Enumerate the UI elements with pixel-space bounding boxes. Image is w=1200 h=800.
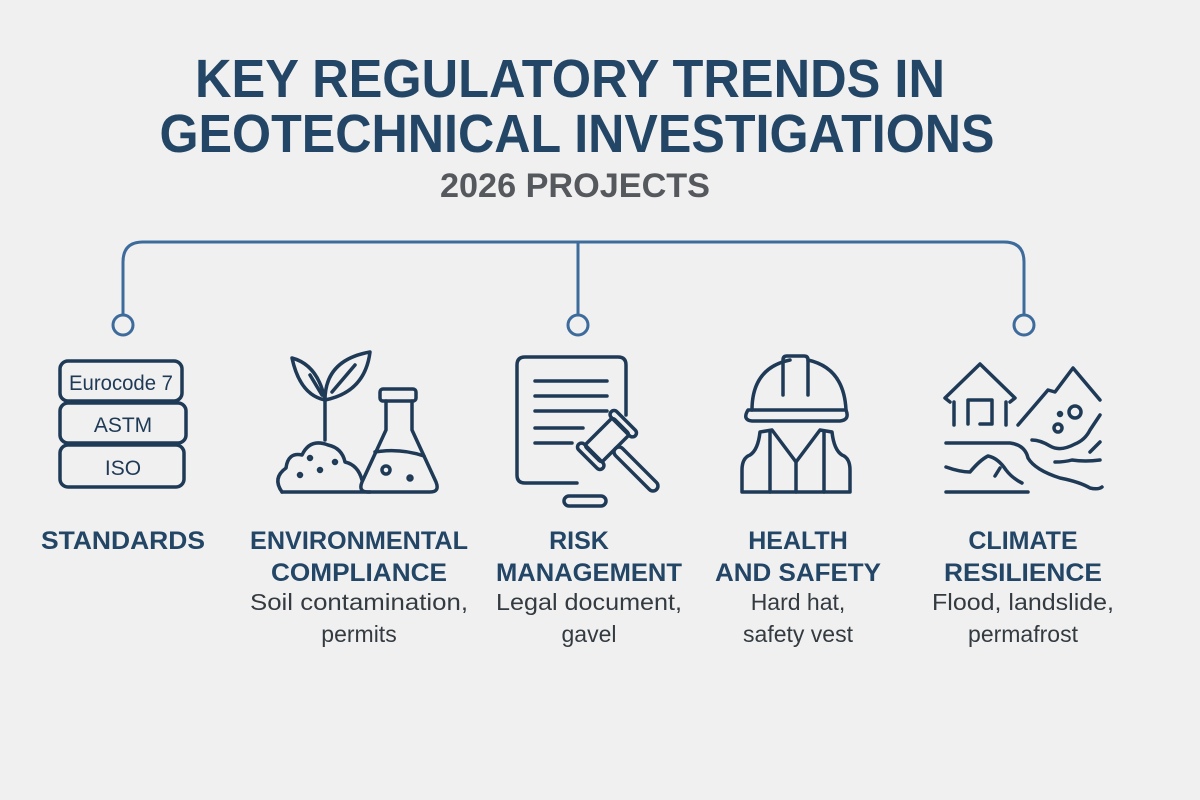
icon: hard hat and vest [742, 356, 850, 492]
icon: standards stack: ISO [105, 457, 141, 480]
label: risk management [496, 527, 682, 587]
icon: plant and flask [278, 352, 437, 492]
icon: climate flood landslide [945, 364, 1102, 492]
icon: standards stack: Eurocode 7 [69, 372, 173, 395]
title [160, 49, 994, 164]
icon: document and gavel [517, 357, 676, 509]
descriptions: Soil contamination, [250, 589, 468, 615]
label: climate resilience: CLIMATE [968, 527, 1078, 555]
icon: standards stack [60, 361, 186, 487]
title: GEOTECHNICAL INVESTIGATIONS [160, 104, 994, 164]
label: environmental compliance: COMPLIANCE [271, 559, 447, 587]
label: health and safety: AND SAFETY [715, 559, 881, 587]
descriptions [250, 589, 1114, 647]
label: risk management: MANAGEMENT [496, 559, 682, 587]
connector tree [113, 242, 1034, 335]
label: environmental compliance [250, 527, 468, 587]
label: health and safety [715, 527, 881, 587]
label: health and safety: HEALTH [748, 527, 848, 555]
descriptions: Legal document, [496, 589, 682, 615]
label: standards: STANDARDS [41, 527, 205, 555]
label: risk management: RISK [549, 527, 609, 555]
title: KEY REGULATORY TRENDS IN [195, 49, 945, 109]
label: environmental compliance: ENVIRONMENTAL [250, 527, 468, 555]
descriptions: Flood, landslide, [932, 589, 1114, 615]
descriptions: permafrost [968, 621, 1079, 647]
descriptions: gavel [562, 621, 616, 647]
label: climate resilience [944, 527, 1102, 587]
descriptions: permits [321, 621, 397, 647]
icon: standards stack: ASTM [94, 414, 152, 437]
subtitle: 2026 PROJECTS [440, 167, 710, 205]
descriptions: Hard hat, [751, 589, 845, 615]
descriptions: safety vest [743, 621, 854, 647]
label: climate resilience: RESILIENCE [944, 559, 1102, 587]
labels [41, 527, 1102, 587]
